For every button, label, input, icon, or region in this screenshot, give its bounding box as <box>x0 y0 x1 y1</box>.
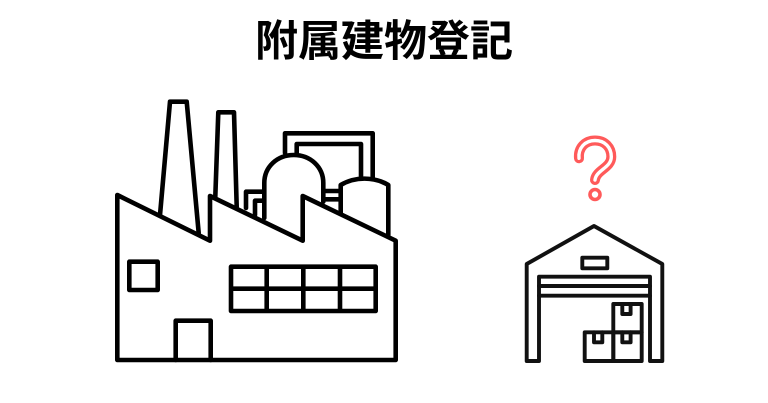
title: 附属建物登記 <box>255 18 513 66</box>
factory back pipes <box>246 133 373 215</box>
warehouse sign <box>582 258 607 268</box>
icon: warehouse <box>527 226 662 361</box>
factory building outline <box>117 195 396 360</box>
icon: factory <box>117 102 396 360</box>
warehouse boxes <box>585 304 642 361</box>
factory domed tank <box>264 155 323 218</box>
factory chimneys <box>160 102 237 233</box>
warehouse shutter <box>539 286 650 296</box>
factory window grid <box>231 267 376 311</box>
warehouse outline <box>527 226 662 361</box>
icon: red question mark <box>579 140 611 200</box>
factory door <box>176 321 211 360</box>
factory cylinder tank <box>341 179 388 235</box>
factory small window <box>129 262 158 290</box>
